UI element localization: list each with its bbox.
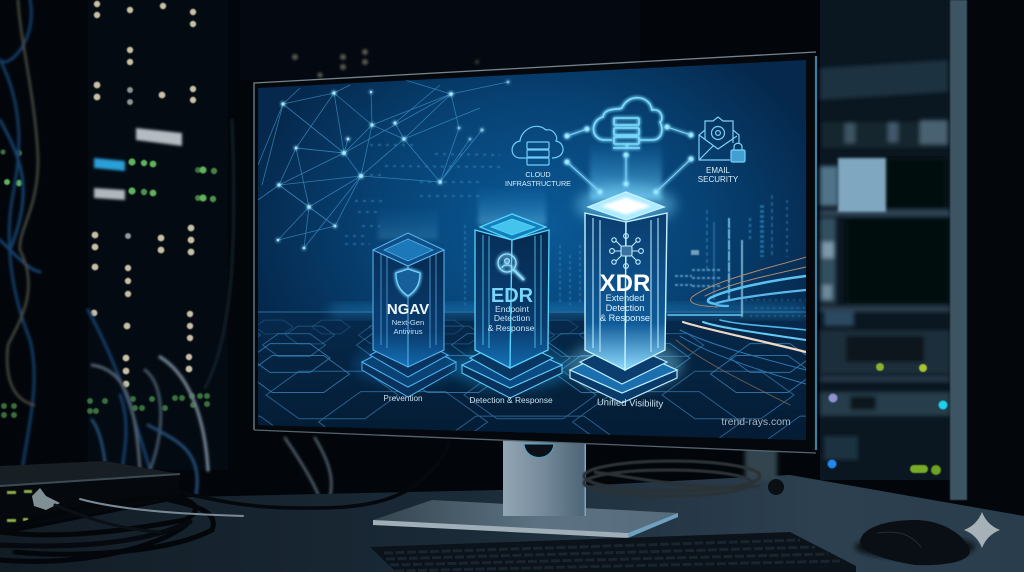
- rack display bars: [94, 128, 182, 200]
- NGAV base: [361, 352, 457, 398]
- EDR base: [460, 352, 564, 399]
- EDR subtitle: Detection: [494, 313, 530, 323]
- mouse: [855, 520, 975, 565]
- desk surface: [0, 475, 1024, 572]
- left server rack with indicator lights: [0, 1, 217, 418]
- tower: EDR: [454, 185, 570, 398]
- screen background: [250, 50, 820, 450]
- rack status lights: tan: [91, 1, 196, 387]
- EDR body: [475, 214, 549, 368]
- label: email security: [698, 167, 738, 182]
- background network cables: [0, 0, 331, 500]
- tower: NGAV: [353, 205, 463, 397]
- city skyline: [465, 195, 806, 317]
- rack status lights: green: [0, 149, 217, 418]
- XDR body: [585, 192, 667, 370]
- monitor frame: [254, 52, 816, 453]
- NGAV subtitle: [392, 320, 424, 334]
- NGAV body: [373, 233, 444, 367]
- monitor stand: [373, 440, 678, 538]
- stand base: [373, 500, 678, 533]
- cable hole: [524, 444, 554, 458]
- label: email security: SECURITY: [698, 175, 739, 184]
- network constellation: [258, 80, 509, 249]
- stand neck: [503, 440, 586, 516]
- connector lines to XDR: [565, 125, 693, 194]
- monitor screen: [258, 60, 806, 440]
- XDR base: [568, 355, 678, 404]
- label: email security: EMAIL: [706, 166, 731, 175]
- horizon glow line: [258, 306, 806, 316]
- icon: magnifier: [498, 254, 524, 280]
- EDR subtitle: [488, 304, 535, 333]
- hexagon floor: [258, 311, 806, 440]
- network switch on desk: [0, 461, 180, 530]
- rack upright: [950, 0, 967, 500]
- cable coil beside switch: [0, 442, 450, 561]
- rack screen: [838, 158, 886, 212]
- XDR subtitle: Extended: [606, 293, 644, 303]
- NGAV subtitle: Antivirus: [393, 327, 423, 336]
- XDR subtitle: Detection: [606, 303, 644, 313]
- icon: large cloud: [593, 98, 662, 148]
- right server rack: [820, 0, 967, 500]
- pillar labels: [384, 395, 664, 409]
- keyboard: [370, 532, 856, 572]
- icon: small cloud: [512, 126, 563, 165]
- label: unified visibility: Unified Visibility: [597, 397, 664, 410]
- label: cloud infrastructure: CLOUD: [525, 170, 551, 179]
- XDR subtitle: [600, 293, 650, 323]
- label: cloud infrastructure: [506, 172, 571, 186]
- XDR subtitle: & Response: [600, 313, 650, 323]
- NGAV subtitle: Next-Gen: [392, 318, 424, 327]
- icon: shield: [396, 269, 420, 296]
- icon: email with lock: [699, 117, 745, 162]
- label: cloud infrastructure: INFRASTRUCTURE: [505, 179, 571, 188]
- watermark: site address: trend-rays.com: [721, 417, 791, 428]
- EDR subtitle: Endpoint: [495, 304, 530, 314]
- XDR title: XDR: [600, 270, 650, 297]
- coiled cable behind stand: [584, 448, 784, 496]
- tower: XDR: [567, 140, 683, 403]
- NGAV title: NGAV: [387, 301, 429, 318]
- light streaks: [668, 257, 806, 405]
- label: prevention: Prevention: [383, 394, 423, 403]
- EDR title: EDR: [491, 285, 534, 307]
- EDR subtitle: & Response: [488, 323, 535, 333]
- label: detection and response: Detection & Response: [469, 395, 553, 405]
- rack lights: [828, 363, 948, 475]
- icon: connected hub: [610, 234, 643, 268]
- background data rows: [345, 145, 500, 244]
- icon: sparkle watermark: [964, 512, 1000, 548]
